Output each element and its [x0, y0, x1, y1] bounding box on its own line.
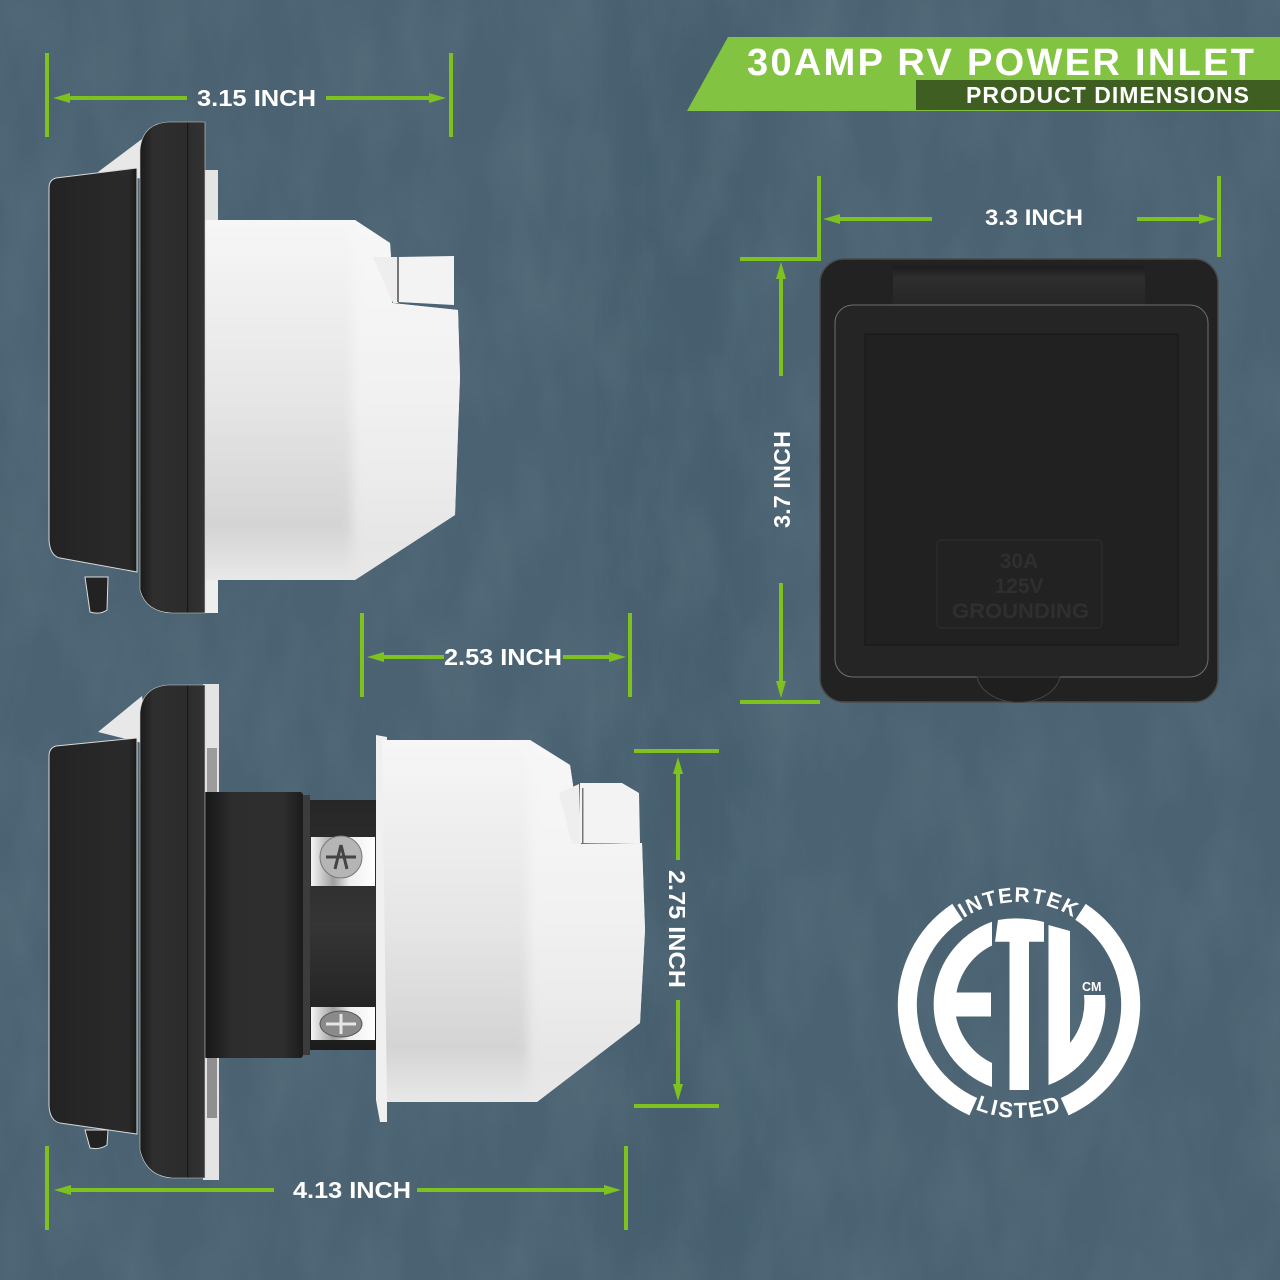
dimension: 3.3 inch [817, 176, 1221, 261]
embossed rating label [937, 540, 1102, 628]
dimension: 2.53 inch [360, 613, 632, 697]
label: 3.3 INCH [985, 205, 1083, 230]
latch [373, 256, 454, 305]
lid [835, 305, 1208, 677]
INTERTEK text: INTERTEK [957, 887, 1080, 918]
front cover [49, 738, 137, 1134]
pull tab [977, 677, 1060, 702]
label: 3.7 INCH [769, 431, 795, 528]
white cap body [382, 740, 645, 1102]
embossed rating label: GROUNDING [952, 600, 1089, 623]
dimension: 2.75 inch [634, 749, 719, 1108]
latch [559, 783, 640, 844]
flange [140, 122, 205, 613]
LISTED text: LISTED [976, 1096, 1058, 1118]
CM mark: CM [1082, 980, 1101, 994]
bracket and screw bottom [311, 1007, 375, 1040]
dimension: 4.13 inch [45, 1146, 628, 1230]
tab [85, 1130, 108, 1149]
letter E [934, 922, 992, 1087]
neck [310, 800, 382, 1050]
label: 2.53 INCH [444, 644, 562, 670]
label: 3.15 INCH [197, 85, 316, 111]
white wing [98, 139, 150, 180]
subtitle text: PRODUCT DIMENSIONS [966, 82, 1249, 108]
front cover [49, 168, 137, 572]
front view: closed cover [820, 259, 1218, 702]
dimension: 3.15 inch [45, 53, 453, 137]
outer ring [907, 912, 973, 1107]
embossed rating label: 30A [1000, 550, 1038, 573]
inset panel [865, 334, 1178, 645]
white plate behind flange [203, 170, 218, 222]
ETL listed logo [898, 887, 1140, 1118]
white rear plate [203, 684, 219, 1180]
base plate [820, 259, 1218, 702]
title text: 30AMP RV POWER INLET [747, 42, 1254, 84]
flange [140, 685, 205, 1178]
side view: inlet closed [49, 122, 480, 613]
letter T [995, 918, 1044, 1090]
hinge recess [893, 266, 1145, 305]
title banner [687, 37, 1280, 111]
white body [205, 220, 460, 580]
label: 2.75 INCH [664, 870, 690, 988]
dimension: 3.7 inch [740, 257, 820, 704]
white wing [98, 696, 150, 745]
label: 4.13 INCH [293, 1177, 411, 1203]
white plate [376, 735, 387, 1122]
bracket and screw top [311, 836, 375, 886]
collar [203, 792, 303, 1058]
embossed rating label: 125V [994, 575, 1044, 598]
side view: inlet open with neck [49, 684, 660, 1180]
letter L [1048, 925, 1105, 1085]
tab [85, 577, 108, 613]
